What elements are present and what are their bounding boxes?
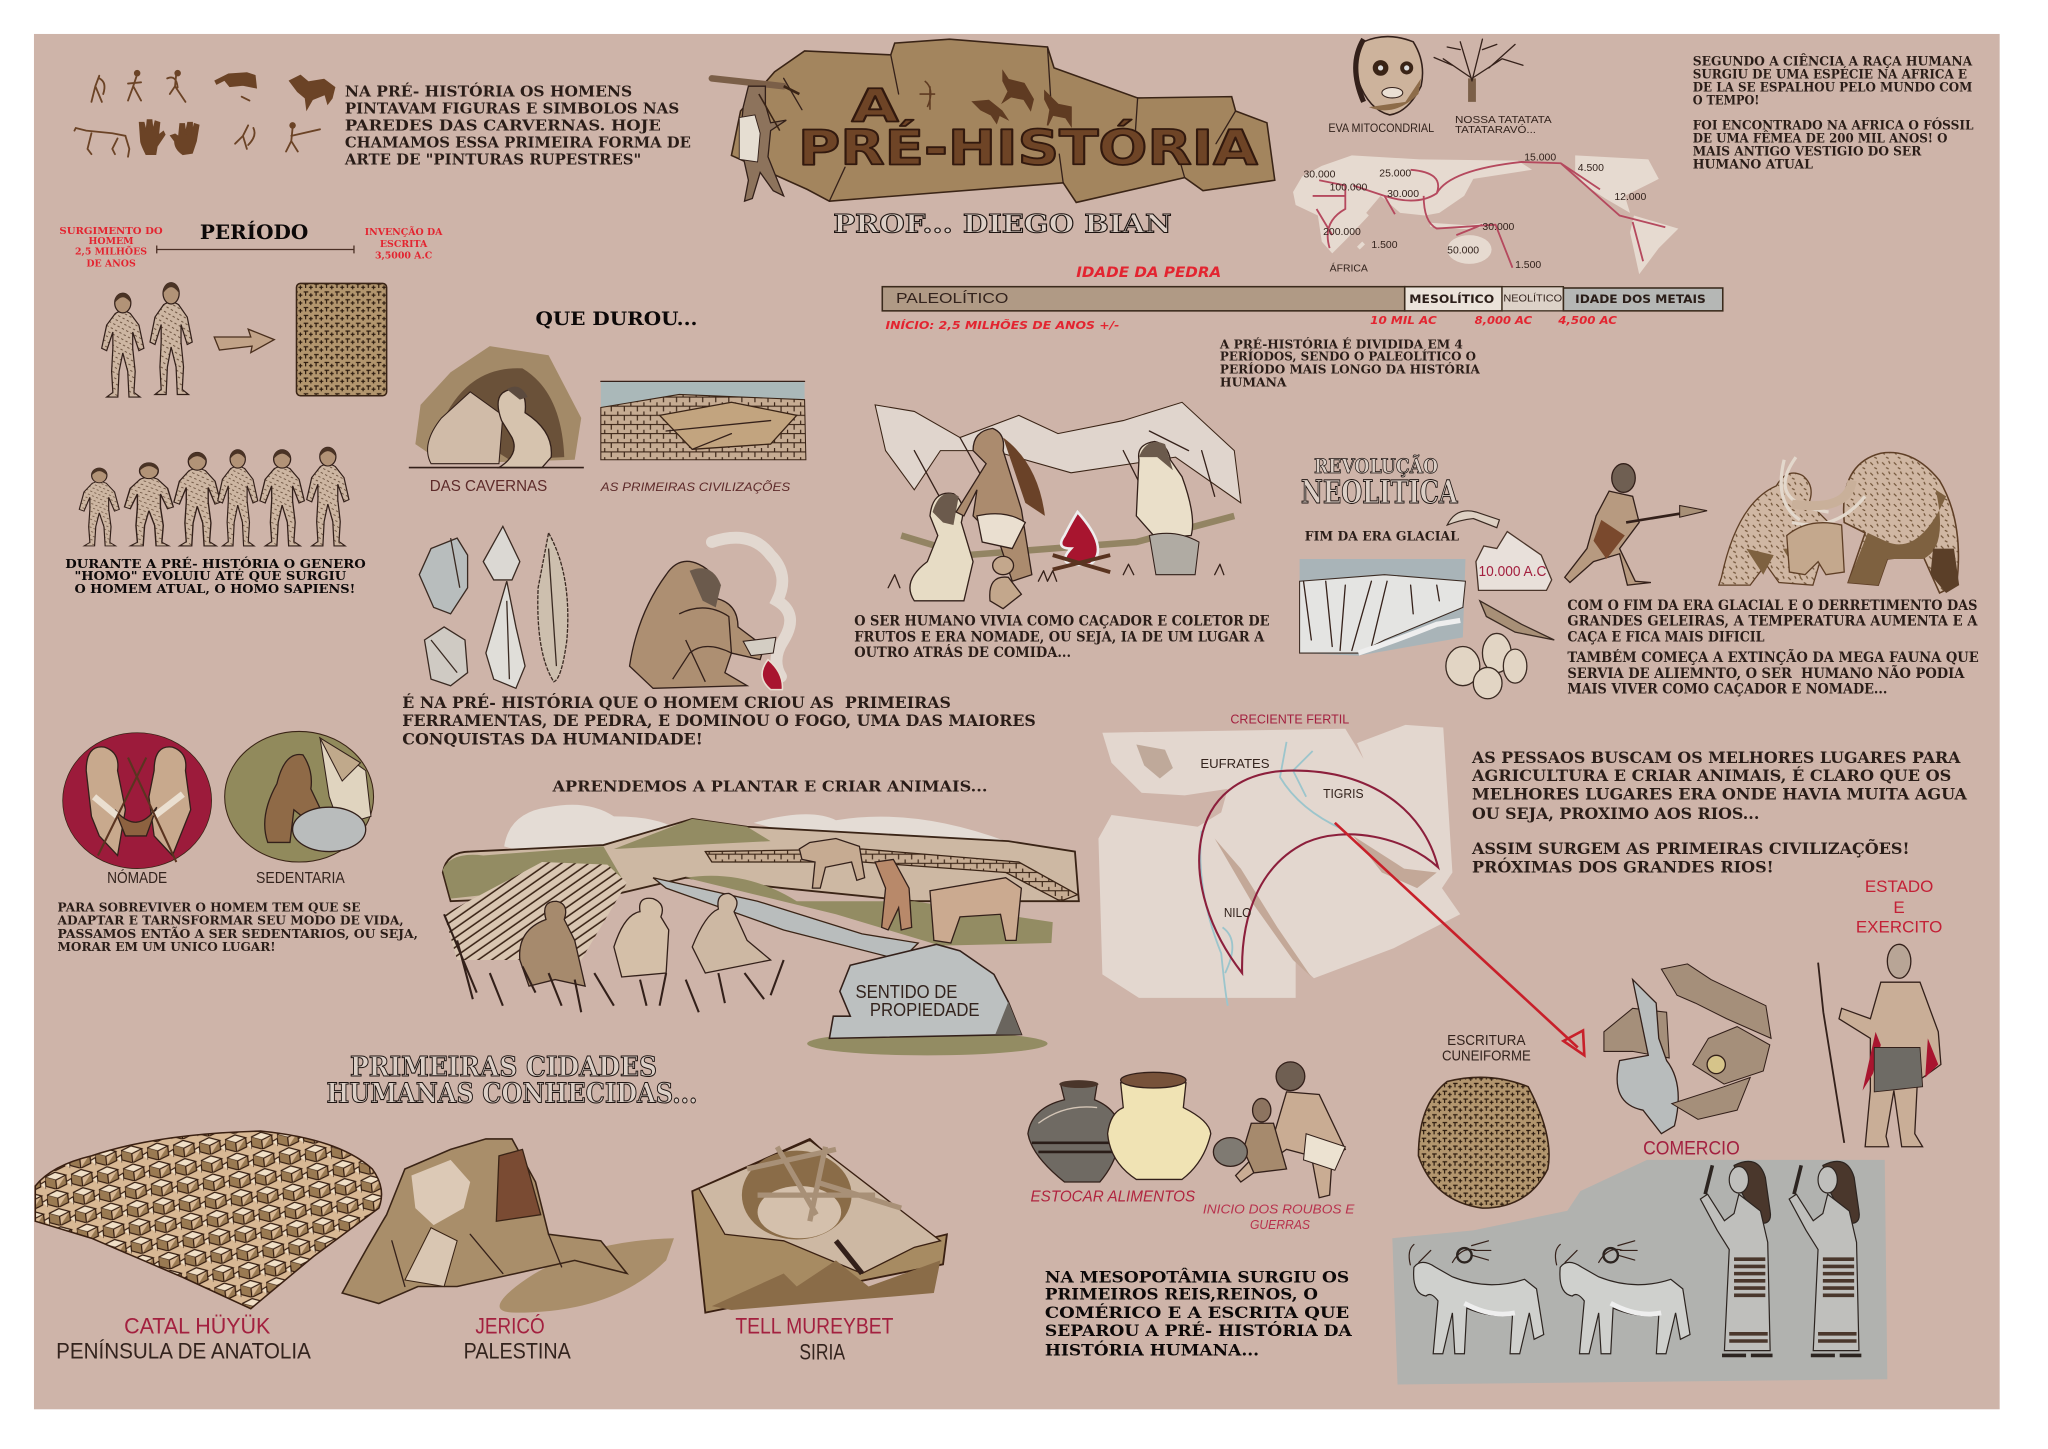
text: rock art description: PAREDES DAS CARVERNAS. HOJE [345, 117, 661, 135]
text: tools and fire [402, 693, 1036, 748]
panel: Mesopotamian relief [1392, 1160, 1887, 1384]
migration date labels: 30.000 [1304, 170, 1336, 181]
text: rivers and civilizations: MELHORES LUGARES ERA ONDE HAVIA MUITA AGUA [1472, 784, 1968, 803]
label: invenção da escrita [365, 226, 443, 262]
text: rivers and civilizations [1471, 748, 1968, 876]
map labels: EUFRATES [1200, 756, 1270, 771]
arrow: humans to writing [214, 329, 274, 353]
title word PRÉ-HISTÓRIA: PRÉ-HISTÓRIA [798, 120, 1259, 177]
map labels: TIGRIS [1323, 786, 1364, 801]
hills [443, 819, 1079, 901]
icon: seed pod [1480, 601, 1554, 640]
heading: revolução neolítica: REVOLUÇÃO [1314, 454, 1438, 478]
icon: nuts and seeds [1446, 633, 1527, 699]
text: rock art description: PINTAVAM FIGURAS E SIMBOLOS NAS [345, 100, 679, 118]
title stone: A Pré-História [731, 39, 1275, 202]
label: Tell Mureybet, Síria [735, 1314, 894, 1365]
text: evolution of genus homo: DURANTE A PRÉ- HISTÓRIA O GENERO [65, 555, 366, 571]
rock art on title stone [920, 72, 1071, 125]
text: rivers and civilizations: ASSIM SURGEM AS PRIMEIRAS CIVILIZAÇÕES! [1471, 839, 1910, 858]
migration date labels: 50.000 [1447, 245, 1479, 256]
label: estocar alimentos: ESTOCAR ALIMENTOS [1031, 1189, 1196, 1206]
illustration: melting glacier [1300, 559, 1465, 656]
label: sedentária: SEDENTARIA [256, 870, 345, 887]
text: becoming sedentary: PARA SOBREVIVER O HOMEM TEM QUE SE [57, 900, 360, 915]
illustration: hunter with spear [1565, 464, 1707, 585]
migration date labels: 100.000 [1330, 183, 1368, 194]
text: hunter gatherer life [854, 614, 1270, 661]
segment: paleolítico: PALEOLÍTICO [896, 290, 1008, 307]
icon: cuneiform tablet [1418, 1077, 1549, 1208]
text: hunter gatherer life: OUTRO ATRÁS DE COMIDA... [854, 643, 1071, 661]
icon: clay tablet [296, 283, 387, 396]
migration date labels: 4.500 [1578, 163, 1604, 174]
illustration: first civilizations [601, 381, 806, 460]
text: four periods: HUMANA [1220, 375, 1287, 390]
label: Jericó, Palestina: PALESTINA [464, 1338, 571, 1363]
text: Mesopotamia summary [1045, 1268, 1353, 1360]
icon: bone [1447, 511, 1499, 528]
text: becoming sedentary: ADAPTAR E TARNSFORMAR SEU MODO DE VIDA, [56, 913, 404, 928]
label: surgimento do homem: 2,5 MILHÕES [75, 246, 147, 258]
heading: idade da pedra: IDADE DA PEDRA [1076, 265, 1221, 281]
illustration: human evolution [79, 447, 349, 546]
label: escritura cuneiforme: CUNEIFORME [1442, 1049, 1531, 1065]
stone: 10.000 A.C [1476, 532, 1552, 590]
panel: sedentary circle [225, 731, 374, 862]
illustration: stone tools [419, 526, 568, 688]
text: four periods: A PRÉ-HISTÓRIA É DIVIDIDA EM 4 [1219, 336, 1463, 352]
text: origin of humankind: DE UMA FÊMEA DE 200 MIL ANOS! O [1693, 130, 1947, 146]
heading: primeiras cidades humanas conhecidas [327, 1051, 697, 1109]
heading: primeiras cidades humanas conhecidas: PRIMEIRAS CIDADES [350, 1051, 657, 1083]
label: surgimento do homem: DE ANOS [86, 258, 136, 269]
label: Nossa tatatata tataravó [1455, 115, 1552, 136]
label: invenção da escrita: ESCRITA [380, 239, 428, 250]
illustration: warrior with spear [1818, 944, 1941, 1147]
panel: rock art pictographs [74, 71, 334, 157]
label: Jericó, Palestina: JERICÓ [475, 1314, 545, 1339]
label: Çatal Hüyük, Península de Anatolia [56, 1314, 311, 1363]
text: rock art description [344, 83, 691, 169]
text: origin of humankind [1693, 53, 1974, 172]
label: Jericó, Palestina [464, 1314, 571, 1363]
label: Tell Mureybet, Síria: SIRIA [799, 1340, 845, 1365]
text: hunter gatherer life: FRUTOS E ERA NOMADE, OU SEJA, IA DE UM LUGAR A [854, 629, 1265, 645]
text: rivers and civilizations: AGRICULTURA E CRIAR ANIMAIS, É CLARO QUE OS [1471, 766, 1951, 785]
panel: nomad circle [63, 733, 212, 869]
migration date labels [1304, 153, 1646, 275]
heading: que durou: QUE DUROU... [536, 309, 697, 330]
label: estado e exército: ESTADO [1865, 877, 1933, 896]
label: das cavernas: DAS CAVERNAS [430, 478, 547, 495]
migration routes [1313, 162, 1665, 268]
segment: mesolítico [1405, 287, 1502, 311]
illustration: mammoths and tiger [1719, 453, 1959, 593]
illustration: fighting men [1213, 1062, 1345, 1198]
label: início dos roubos e guerras: GUERRAS [1250, 1217, 1310, 1232]
text: origin of humankind: SEGUNDO A CIÊNCIA A RAÇA HUMANA [1693, 53, 1973, 69]
icon: two early humans [102, 283, 192, 397]
illustration: cave dweller [409, 346, 584, 468]
stone: 10.000 A.C: 10.000 A.C [1479, 564, 1546, 580]
illustration: trade hands and fish [1604, 964, 1771, 1134]
text: tools and fire: CONQUISTAS DA HUMANIDADE! [402, 729, 703, 748]
text: evolution of genus homo [65, 555, 366, 596]
text: Mesopotamia summary: PRIMEIROS REIS,REINOS, O [1045, 1285, 1318, 1304]
text: end of the ice age: SERVIA DE ALIEMNTO, O SER HUMANO NÃO PODIA [1567, 663, 1965, 682]
text: hunter gatherer life: O SER HUMANO VIVIA COMO CAÇADOR E COLETOR DE [854, 614, 1270, 630]
text: end of the ice age: GRANDES GELEIRAS, A TEMPERATURA AUMENTA E A [1567, 614, 1978, 630]
label: estado e exército: EXERCITO [1856, 918, 1942, 937]
heading: revolução neolítica: NEOLITICA [1301, 475, 1458, 511]
label: comércio: COMERCIO [1643, 1138, 1740, 1160]
panel: period timeline [59, 220, 443, 269]
heading: revolução neolítica [1301, 454, 1458, 511]
segment: idade dos metais [1563, 288, 1723, 311]
migration date labels: 30.000 [1387, 189, 1419, 200]
icon: mitochondrial Eve head [1355, 37, 1423, 115]
cattle [799, 839, 865, 888]
timeline dates: 10 MIL AC [1370, 315, 1437, 327]
map labels [1200, 756, 1364, 920]
text: end of the ice age: CAÇA E FICA MAIS DIFICIL [1567, 629, 1765, 645]
label: invenção da escrita: INVENÇÃO DA [365, 226, 443, 238]
stone: sentido de propriedade: PROPIEDADE [870, 999, 980, 1020]
panel: ages timeline bar [882, 265, 1723, 332]
stone: sentido de propriedade: SENTIDO DE [856, 981, 957, 1002]
illustration: storage vases [1028, 1072, 1211, 1182]
stream [653, 878, 918, 960]
label: nômade: NÓMADE [107, 868, 167, 887]
crescent outline [1199, 771, 1438, 973]
text: becoming sedentary: MORAR EM UM UNICO LUGAR! [57, 939, 276, 954]
timeline dates: INÍCIO: 2,5 MILHÕES DE ANOS +/- [886, 319, 1119, 332]
text: tools and fire: FERRAMENTAS, DE PEDRA, E DOMINOU O FOGO, UMA DAS MAIORES [402, 711, 1036, 730]
text: end of the ice age [1567, 598, 1979, 698]
label: Nossa tatatata tataravó: TATATARAVÓ... [1455, 125, 1536, 136]
migration date labels: 15.000 [1524, 153, 1556, 164]
label: invenção da escrita: 3,5000 A.C [375, 251, 432, 262]
segment: mesolítico: MESOLÍTICO [1409, 291, 1494, 306]
map labels: NILO [1224, 905, 1251, 920]
author credit: PROF... DIEGO BIAN [833, 209, 1172, 238]
illustration: early farming scene [443, 805, 1079, 1012]
segment: neolítico [1502, 287, 1563, 311]
segment: idade dos metais: IDADE DOS METAIS [1575, 292, 1706, 306]
illustration: hunter-gatherers by the fire [875, 402, 1241, 609]
segment: paleolítico [882, 287, 1405, 311]
text: becoming sedentary: PASSAMOS ENTÃO A SER SEDENTARIOS, OU SEJA, [57, 926, 418, 941]
arrow: from Mesopotamia to commerce [1335, 823, 1584, 1055]
text: four periods: PERÍODOS, SENDO O PALEOLÍTICO O [1220, 348, 1476, 363]
text: end of the ice age: MAIS VIVER COMO CAÇADOR E NOMADE... [1567, 682, 1887, 698]
text: origin of humankind: HUMANO ATUAL [1693, 157, 1813, 172]
illustration: caveman making fire [630, 538, 790, 690]
text: rivers and civilizations: AS PESSAOS BUSCAM OS MELHORES LUGARES PARA [1471, 748, 1961, 767]
label: início dos roubos e guerras [1203, 1201, 1355, 1232]
text: rock art description: ARTE DE "PINTURAS RUPESTRES" [344, 151, 641, 169]
migration date labels: 1.500 [1515, 260, 1541, 271]
heading: fim da era glacial: FIM DA ERA GLACIAL [1305, 530, 1459, 545]
label: escritura cuneiforme [1442, 1033, 1531, 1065]
farmers [520, 901, 585, 986]
label: Çatal Hüyük, Península de Anatolia: CATAL HÜYÜK [124, 1314, 271, 1339]
text: rivers and civilizations: PRÓXIMAS DOS GRANDES RIOS! [1472, 857, 1774, 876]
caveman hanging from branch [712, 78, 799, 201]
icon: family tree [1434, 39, 1523, 102]
timeline dates [886, 315, 1617, 332]
migration date labels: 25.000 [1379, 168, 1411, 179]
migration date labels: 1.500 [1371, 240, 1398, 251]
text: Mesopotamia summary: HISTÓRIA HUMANA... [1045, 1341, 1259, 1360]
text: evolution of genus homo: O HOMEM ATUAL, O HOMO SAPIENS! [74, 581, 355, 596]
heading: primeiras cidades humanas conhecidas: HUMANAS CONHECIDAS... [327, 1077, 697, 1109]
label: Eva mitocondrial: EVA MITOCONDRIAL [1328, 121, 1434, 135]
illustration: Tell Mureybet [692, 1139, 947, 1313]
stone: sentido de propriedade [807, 944, 1048, 1055]
label: crescente fértil: CRECIENTE FERTIL [1230, 712, 1349, 727]
text: Mesopotamia summary: SEPAROU A PRÉ- HISTÓRIA DA [1045, 1321, 1353, 1340]
title word A: A [852, 79, 899, 132]
label: as primeiras civilizações: AS PRIMEIRAS CIVILIZAÇÕES [600, 479, 791, 494]
women figures [1700, 1161, 1773, 1355]
text: origin of humankind: O TEMPO! [1693, 93, 1759, 108]
text: rivers and civilizations: OU SEJA, PROXIMO AOS RIOS... [1472, 804, 1759, 823]
label: escritura cuneiforme: ESCRITURA [1447, 1033, 1526, 1049]
text: four periods: PERÍODO MAIS LONGO DA HISTÓRIA [1220, 361, 1480, 377]
text: becoming sedentary [56, 900, 418, 954]
label: início dos roubos e guerras: INICIO DOS ROUBOS E [1203, 1201, 1355, 1216]
rivers [1200, 742, 1343, 1006]
text: rock art description: CHAMAMOS ESSA PRIMEIRA FORMA DE [345, 134, 691, 152]
world map: human migration [1293, 153, 1678, 275]
migration date labels: 30.000 [1482, 222, 1515, 233]
label: surgimento do homem: HOMEM [89, 236, 134, 247]
label: estado e exército: E [1893, 898, 1905, 917]
label: Çatal Hüyük, Península de Anatolia: PENÍNSULA DE ANATOLIA [56, 1338, 311, 1363]
crop field [444, 862, 627, 960]
label: estado e exército [1856, 877, 1942, 937]
text: origin of humankind: MAIS ANTIGO VESTIGIO DO SER [1693, 144, 1921, 159]
timeline dates: 4,500 AC [1557, 315, 1617, 327]
timeline dates: 8,000 AC [1475, 315, 1532, 327]
illustration: Çatal Hüyük [35, 1131, 382, 1309]
heading: período: PERÍODO [200, 220, 308, 244]
text: origin of humankind: DE LA SE ESPALHOU PELO MUNDO COM [1693, 80, 1972, 95]
text: Mesopotamia summary: COMÉRICO E A ESCRITA QUE [1045, 1303, 1349, 1322]
migration date labels: ÁFRICA [1330, 262, 1368, 275]
map: fertile crescent [1098, 725, 1460, 1006]
text: end of the ice age: COM O FIM DA ERA GLACIAL E O DERRETIMENTO DAS [1567, 598, 1977, 614]
migration date labels: 200.000 [1323, 227, 1361, 238]
text: origin of humankind: SURGIU DE UMA ESPÉCIE NA AFRICA E [1693, 66, 1967, 82]
label: Nossa tatatata tataravó: NOSSA TATATATA [1455, 115, 1552, 126]
bulls [1409, 1241, 1544, 1354]
clouds [504, 805, 1006, 852]
label: Tell Mureybet, Síria: TELL MUREYBET [735, 1314, 894, 1339]
heading: aprendemos a plantar: APRENDEMOS A PLANTAR E CRIAR ANIMAIS... [551, 778, 987, 796]
illustration: Jericó [342, 1139, 674, 1313]
text: evolution of genus homo: "HOMO" EVOLUIU ATÉ QUE SURGIU [74, 568, 346, 583]
text: Mesopotamia summary: NA MESOPOTÂMIA SURGIU OS [1045, 1268, 1349, 1287]
wall [705, 849, 1078, 901]
text: end of the ice age: TAMBÉM COMEÇA A EXTINÇÃO DA MEGA FAUNA QUE [1567, 647, 1979, 666]
migration date labels: 12.000 [1614, 192, 1646, 203]
label: surgimento do homem: SURGIMENTO DO [59, 226, 163, 237]
label: surgimento do homem [59, 226, 163, 269]
text: four periods [1219, 336, 1480, 390]
text: tools and fire: É NA PRÉ- HISTÓRIA QUE O HOMEM CRIOU AS PRIMEIRAS [402, 693, 951, 712]
text: rock art description: NA PRÉ- HISTÓRIA OS HOMENS [345, 83, 632, 101]
segment: neolítico: NEOLÍTICO [1503, 294, 1563, 305]
text: origin of humankind: FOI ENCONTRADO NA AFRICA O FÓSSIL [1693, 116, 1974, 133]
